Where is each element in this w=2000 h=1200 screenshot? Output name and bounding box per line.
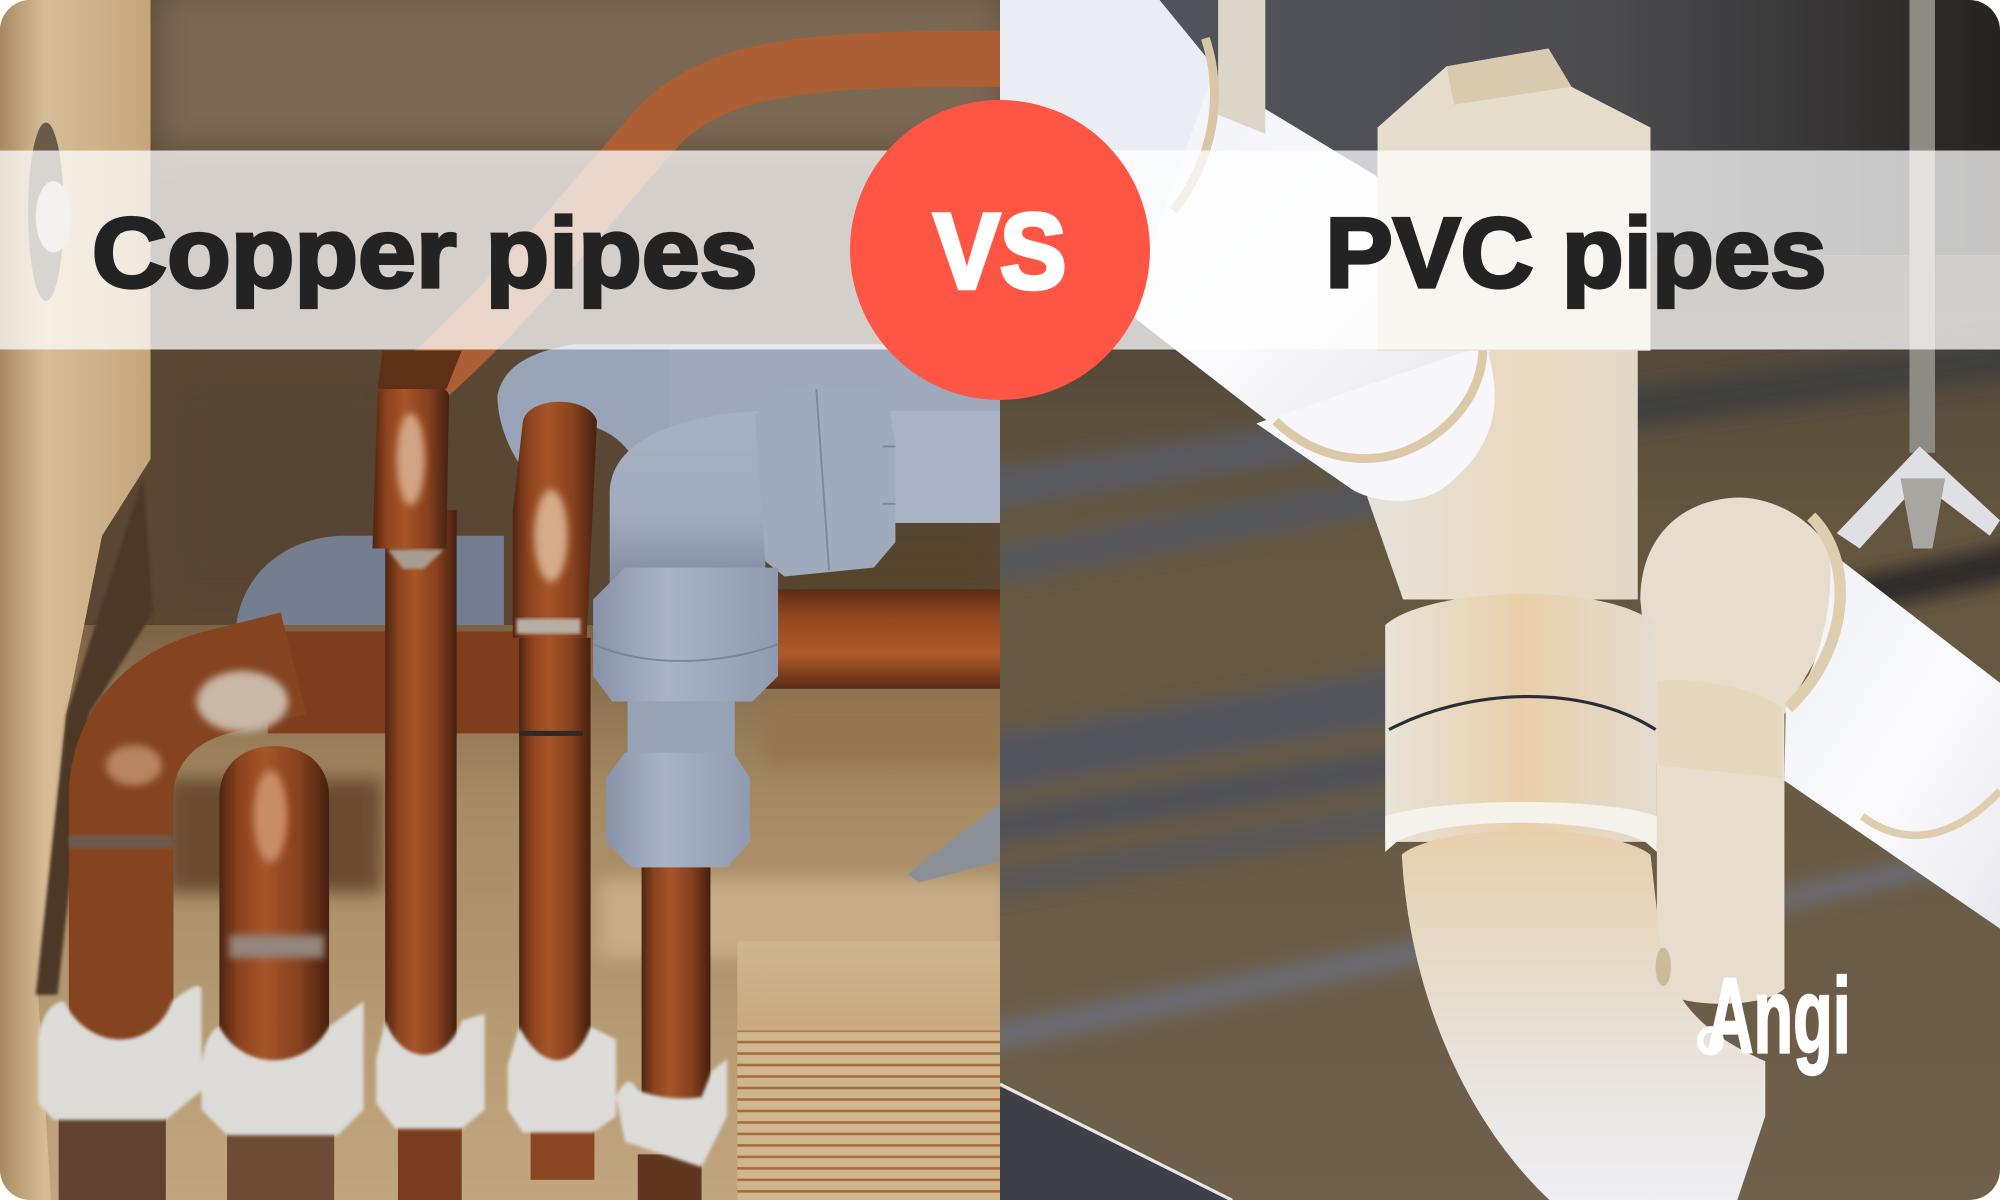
- grey elbow fitting: [593, 389, 1000, 867]
- pipe ends below clips: [59, 1110, 702, 1200]
- wall bolt: [28, 122, 71, 301]
- hanger rod: [1909, 0, 1935, 453]
- grey fitting behind pipes: [236, 536, 504, 628]
- rear bend pipe: [1640, 497, 1849, 1004]
- upper concrete wall texture: [150, 0, 1000, 150]
- small hole on U-bend: [1656, 948, 1671, 986]
- floor beam: [1000, 1087, 1230, 1200]
- VS badge: [850, 100, 1150, 400]
- strap ring on upper pipe: [1173, 38, 1214, 210]
- blurred background conduits: [982, 357, 2000, 1040]
- beam highlight: [1000, 1084, 1232, 1200]
- plastic pipe clips: [38, 986, 727, 1167]
- wooden floor grain: [166, 702, 1008, 957]
- logo: Angi: Angi: [1707, 955, 1851, 1075]
- top copper pipe: [421, 59, 1008, 383]
- grey fitting upper: [497, 344, 1000, 462]
- dark shadow beside wall: [36, 478, 153, 995]
- top tee fitting: [1378, 48, 1651, 351]
- back copper horizontal: [268, 631, 536, 733]
- wooden floor: [0, 625, 1000, 1200]
- grey wedge on the floor: [908, 804, 1000, 883]
- photo: PVC pipes: [982, 0, 2000, 1200]
- tee body: [1367, 344, 1638, 599]
- bent copper pipe left: [69, 663, 293, 1059]
- thin copper pipe: [642, 861, 710, 1103]
- heading: Copper pipes: Copper pipes: [92, 198, 758, 309]
- photo: copper pipes: [0, 0, 1008, 1200]
- hanger strap: [1218, 0, 1265, 134]
- pipe socket below ring: [1256, 344, 1495, 501]
- collar ring on main pipe: [1272, 350, 1488, 463]
- upper-left pipe section: [1000, 0, 1210, 250]
- lower background: [1000, 255, 2000, 1200]
- title band: [0, 151, 2000, 349]
- left wooden wall: [0, 0, 151, 1200]
- main diagonal pipe: [1134, 80, 1490, 420]
- tall copper pipe two: [513, 402, 597, 1071]
- right copper horizontal: [765, 589, 1000, 689]
- tall copper pipe one: [372, 351, 462, 1071]
- sprinkler bracket: [1837, 446, 2000, 548]
- back wall: [0, 0, 1000, 625]
- U-bend pipe: [1402, 831, 1765, 1200]
- short copper pipe: [219, 746, 329, 1071]
- rear diagonal pipe: [1784, 517, 2000, 957]
- VS badge: VS: [934, 191, 1066, 311]
- heading: PVC pipes: PVC pipes: [1325, 198, 1827, 309]
- logo: Angi: [1700, 955, 1851, 1075]
- large coupling: [1385, 594, 1657, 852]
- ceiling: [1160, 0, 2000, 255]
- striped end of boards: [737, 941, 1000, 1200]
